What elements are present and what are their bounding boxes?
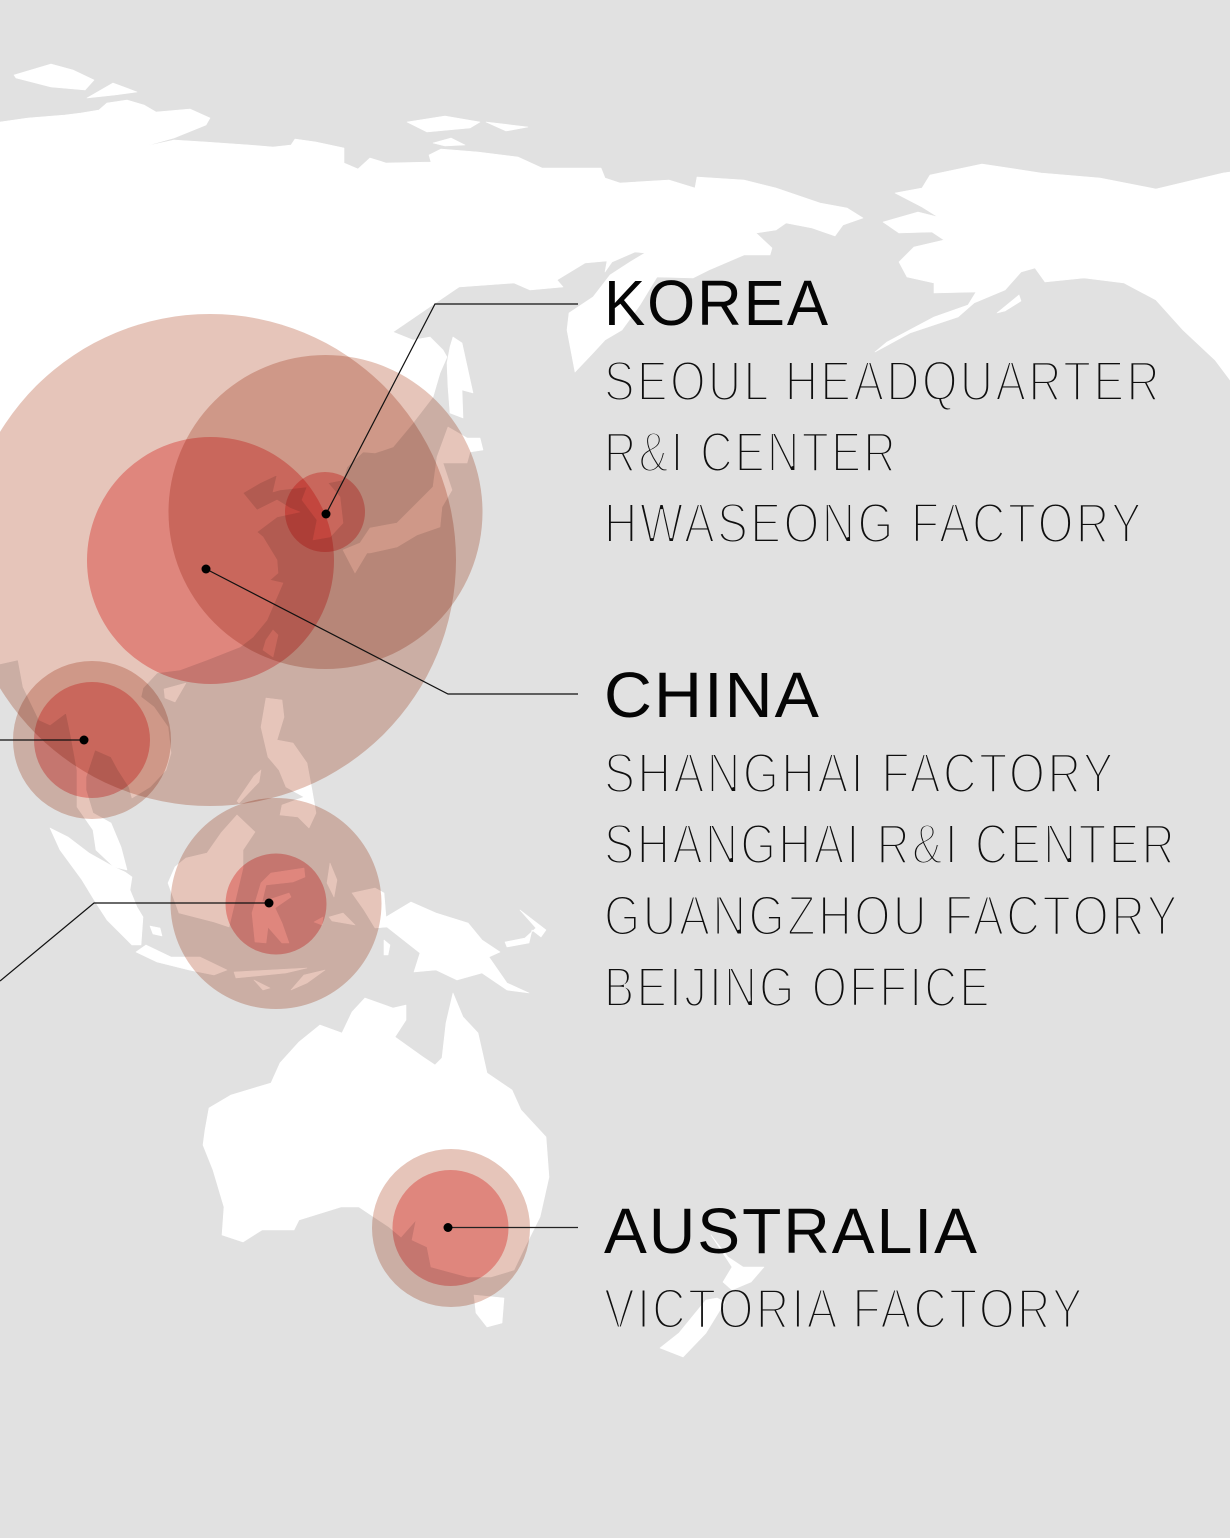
- heading: China: CHINA: [604, 659, 821, 731]
- map: New Zealand: [660, 1235, 764, 1357]
- text block: China: [604, 659, 1180, 1020]
- text block: Australia: [604, 1195, 1085, 1341]
- map: Sulawesi: [252, 868, 305, 943]
- circle: Indonesia outer: [170, 798, 382, 1009]
- circle: Vietnam inner: [34, 682, 150, 798]
- circle: Indonesia inner: [226, 854, 326, 954]
- map: Philippines: [237, 698, 316, 828]
- location: Victoria Factory: VICTORIA FACTORY: [604, 1277, 1085, 1341]
- map: Sumatra and Java: [50, 828, 227, 975]
- location: Shanghai Factory: SHANGHAI FACTORY: [604, 742, 1116, 806]
- circle: China inner: [87, 437, 334, 684]
- circle: Vietnam outer: [13, 661, 171, 819]
- leader line: Indonesia: [0, 898, 274, 981]
- heading: Australia: AUSTRALIA: [604, 1195, 979, 1267]
- map: Kodiak island: [997, 295, 1021, 313]
- leader line: Korea: [322, 304, 578, 518]
- map: Arctic islands: [14, 64, 528, 146]
- circle: Korea inner: [285, 472, 365, 552]
- map: Maluku islands: [314, 863, 355, 925]
- map: Japan: [343, 427, 483, 573]
- leader line: China: [202, 564, 578, 694]
- map: New Guinea and neighbours: [352, 888, 546, 993]
- circle: Korea outer: [168, 355, 482, 669]
- circle: Australia outer: [372, 1149, 530, 1307]
- map: Taiwan and Hainan: [164, 630, 278, 702]
- map: Sakhalin: [447, 337, 473, 418]
- map: Australia: [203, 993, 549, 1277]
- location: Beijing Office: BEIJING OFFICE: [604, 956, 992, 1020]
- leader line: Vietnam: [0, 736, 88, 744]
- location: R&I Center: R&I CENTER: [604, 420, 898, 484]
- text block: Korea: [604, 267, 1162, 556]
- map: Borneo: [168, 815, 255, 927]
- circle: Australia inner: [392, 1170, 508, 1286]
- leader line: Australia: [444, 1223, 578, 1232]
- heading: Korea: KOREA: [604, 267, 830, 339]
- map: Asia mainland: [0, 100, 863, 870]
- circle: China outer: [0, 314, 456, 806]
- map: Lesser Sunda islands: [234, 968, 325, 990]
- map: Tasmania: [474, 1295, 504, 1327]
- map: Alaska and North America: [875, 164, 1230, 380]
